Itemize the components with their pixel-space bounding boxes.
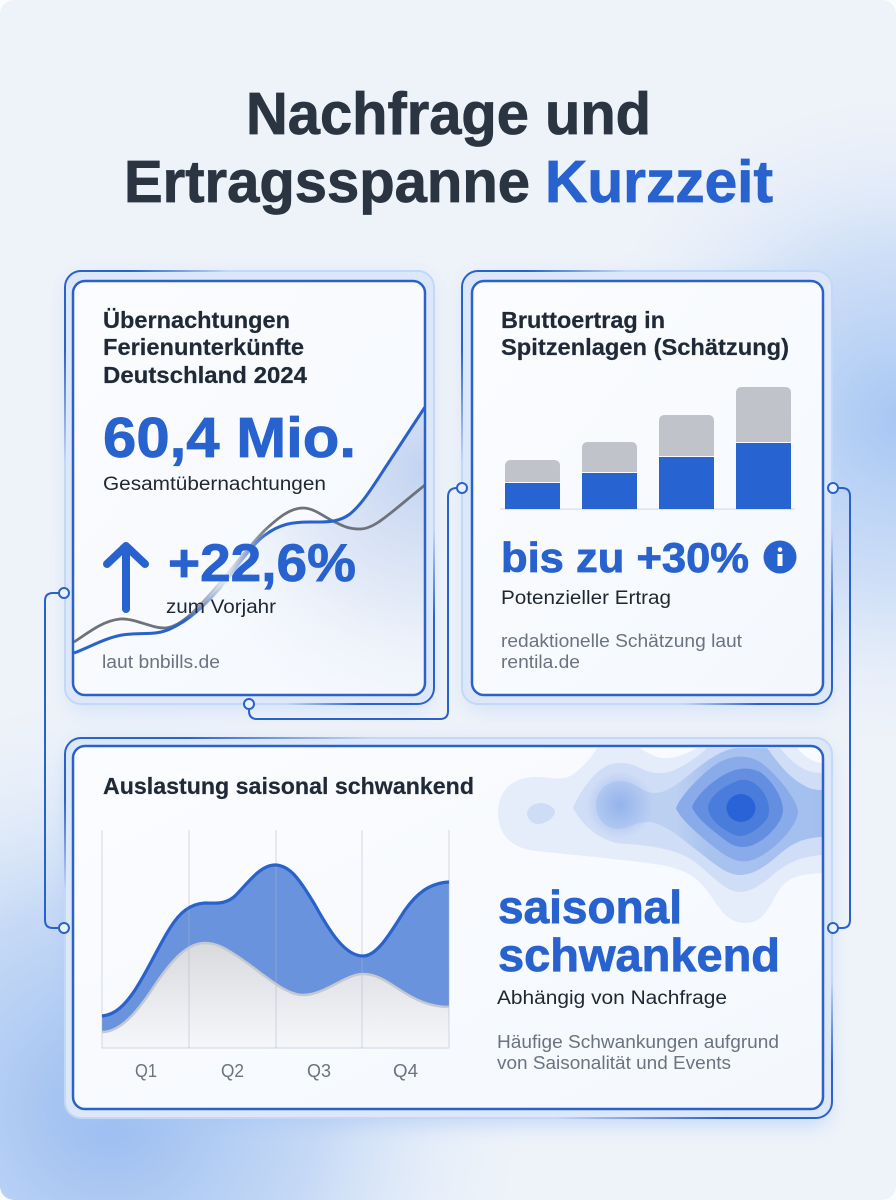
icon: up arrow: [107, 546, 145, 609]
heading: Spitzenlagen (Schätzung): [501, 334, 789, 360]
stat: growth: +22,6%: [168, 534, 356, 593]
heat map: [498, 748, 822, 923]
bar chart: [500, 387, 795, 510]
source: laut bnbills.de: [102, 652, 220, 672]
heading: Deutschland 2024: [103, 362, 307, 388]
note: von Saisonalität und Events: [497, 1053, 731, 1073]
growth label: zum Vorjahr: [166, 597, 277, 618]
stat label: Potenzieller Ertrag: [501, 588, 671, 609]
heading: Übernachtungen: [103, 307, 290, 333]
heading: Bruttoertrag in: [501, 307, 665, 333]
area chart: Q4: [393, 1061, 418, 1081]
area chart: Q3: [307, 1061, 331, 1081]
note: Häufige Schwankungen aufgrund: [497, 1032, 779, 1052]
stat label: Gesamtübernachtungen: [103, 474, 326, 495]
icon: info: [764, 540, 796, 574]
heading: Auslastung saisonal schwankend: [103, 773, 474, 799]
stat: potential yield: bis zu +30%: [501, 534, 749, 581]
note: [497, 1032, 779, 1073]
connector: right: [828, 483, 850, 933]
area chart: Q2: [221, 1061, 244, 1081]
heading: Ferienunterkünfte: [103, 334, 304, 360]
stat label: Abhängig von Nachfrage: [497, 988, 727, 1009]
connector: middle: [244, 483, 467, 719]
line chart: [74, 406, 424, 654]
source: rentila.de: [501, 652, 580, 672]
panel: overnight stays: [65, 271, 434, 710]
title: Kurzzeit: [545, 149, 773, 215]
title: [124, 81, 773, 215]
heading: [103, 307, 307, 388]
title: Nachfrage und: [246, 81, 651, 147]
connector: left: [45, 588, 69, 933]
panel: seasonal occupancy: [65, 738, 832, 1125]
source: [501, 631, 742, 672]
title: Ertragsspanne: [124, 149, 530, 215]
stat: seasonal: schwankend: [498, 929, 780, 981]
stat: seasonal: saisonal: [498, 881, 682, 933]
stat: seasonal: [498, 881, 780, 981]
source: redaktionelle Schätzung laut: [501, 631, 742, 651]
area chart: [102, 830, 449, 1081]
stat: total stays: 60,4 Mio.: [103, 406, 356, 470]
panel: gross yield: [462, 271, 832, 710]
heading: [501, 307, 789, 360]
area chart: Q1: [135, 1061, 157, 1081]
